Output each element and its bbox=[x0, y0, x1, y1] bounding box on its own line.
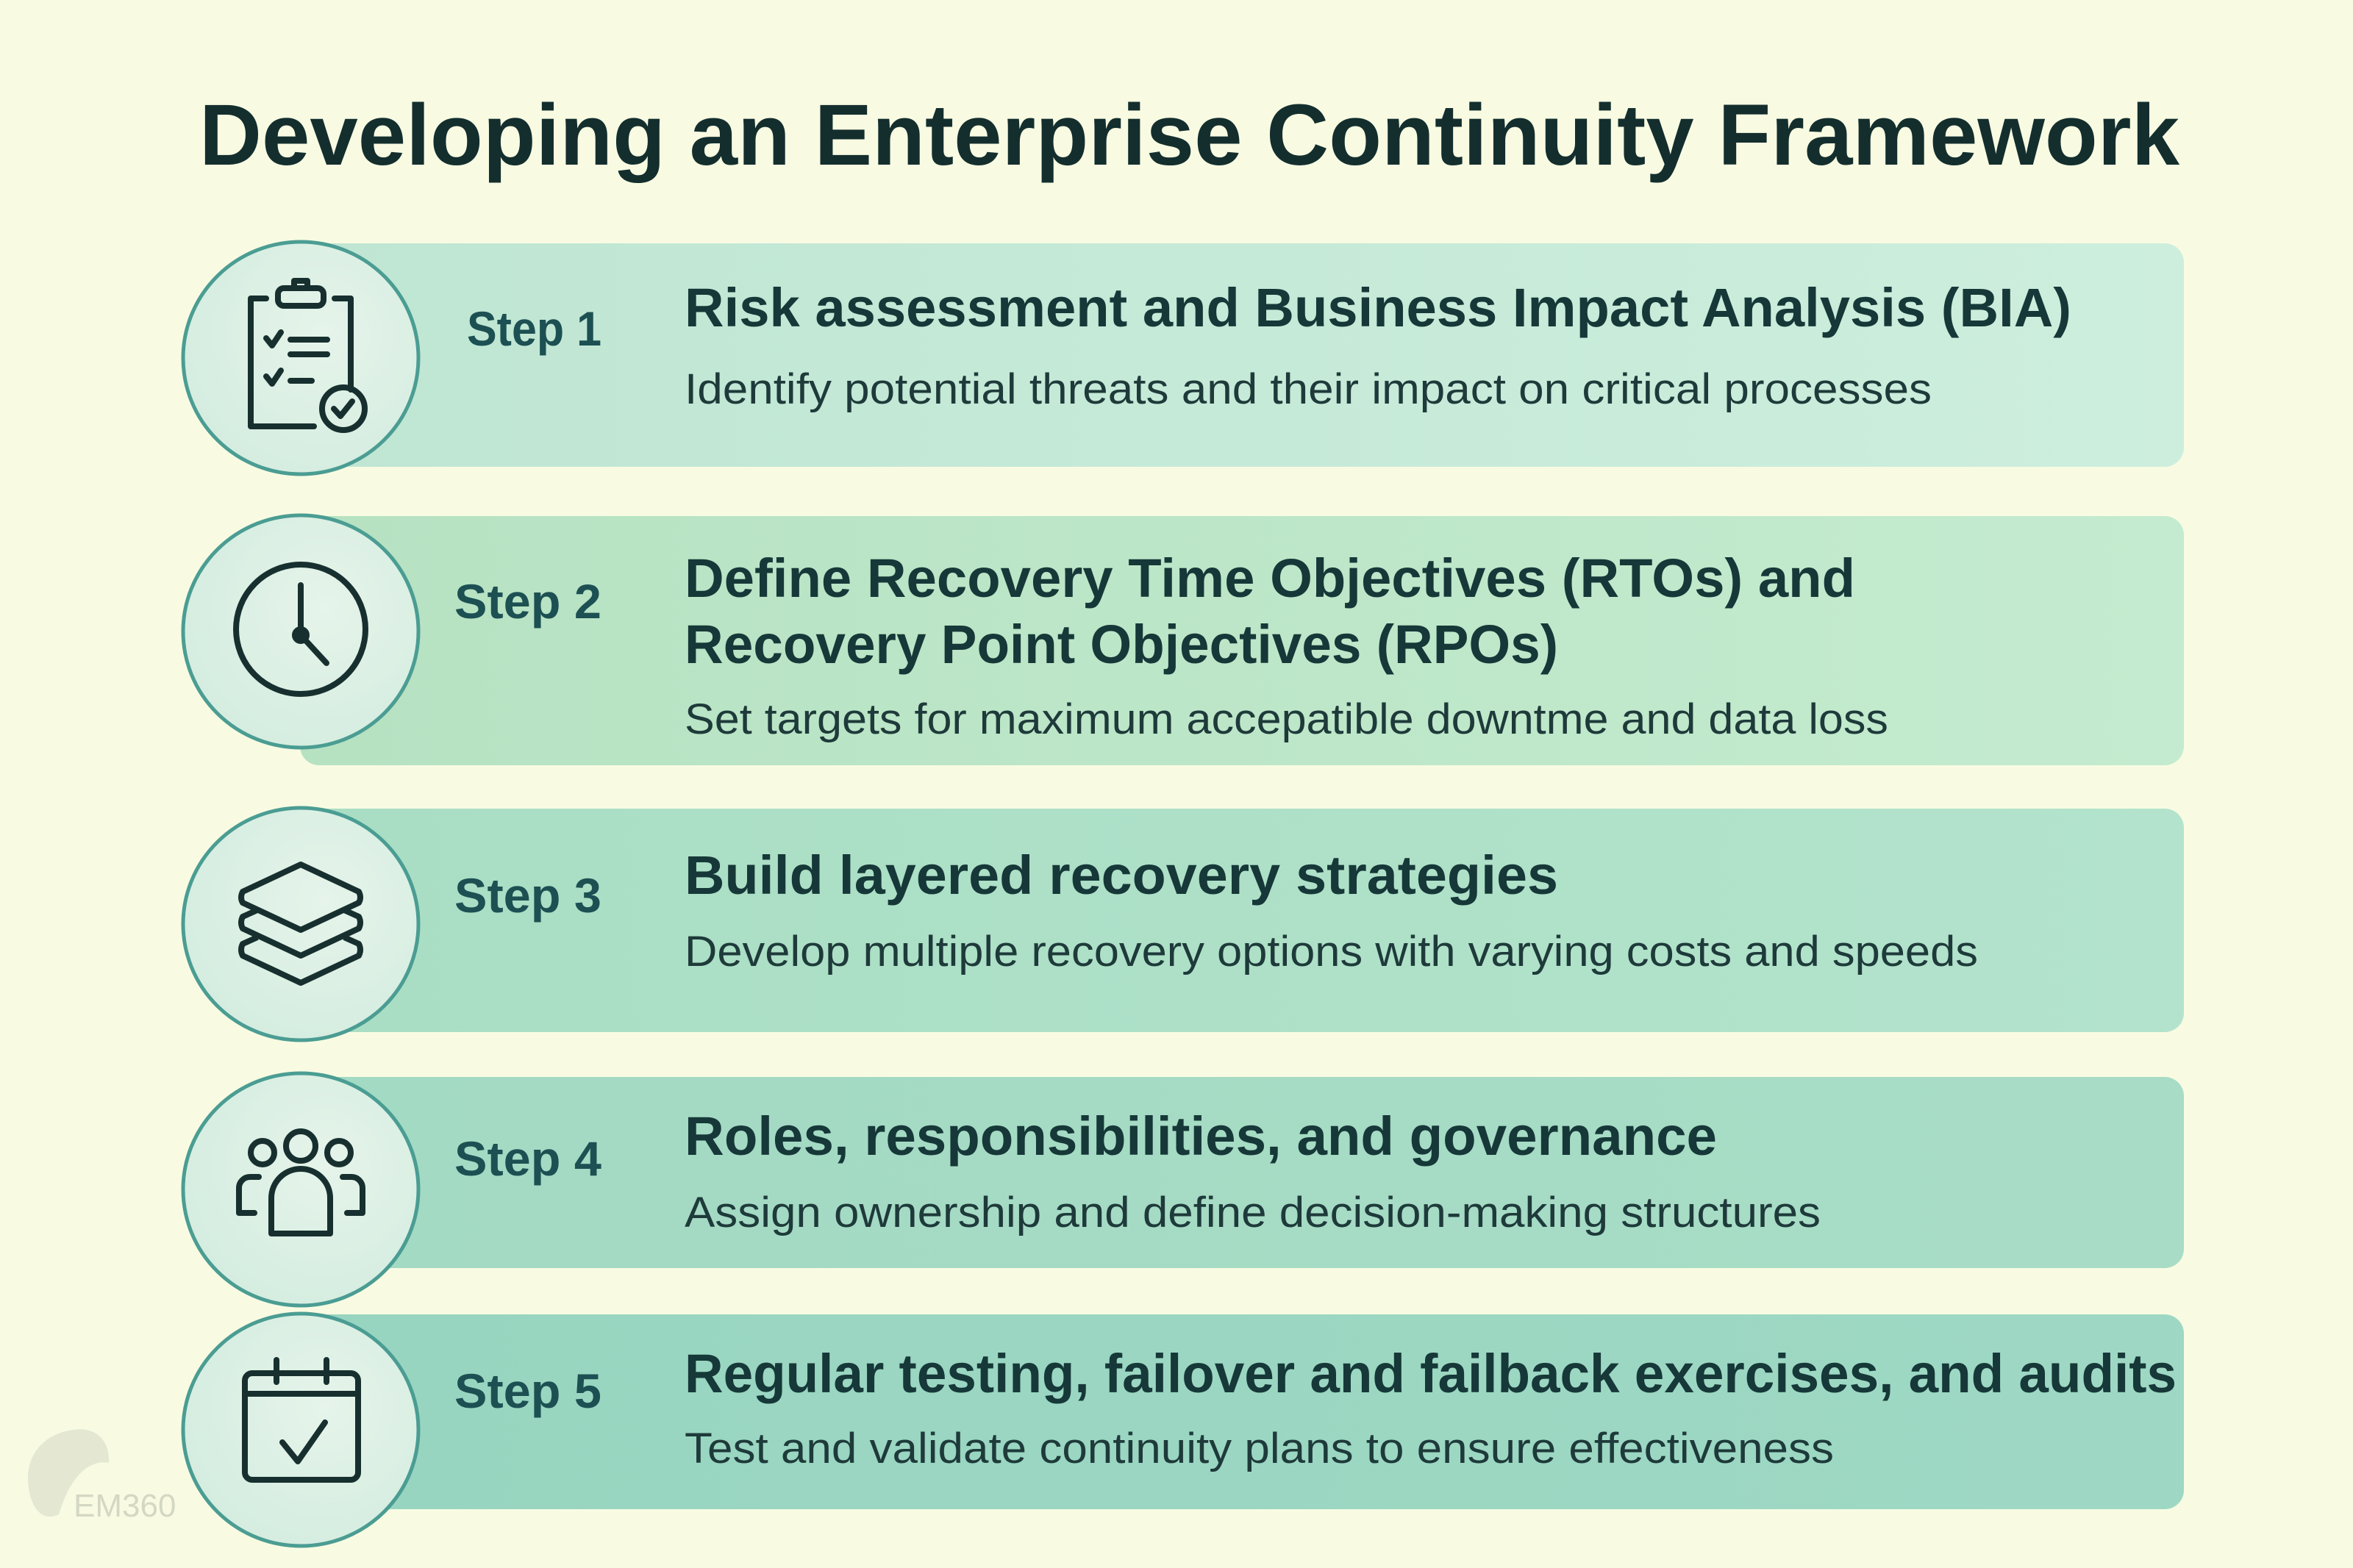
heading 3: Build layered recovery strategies bbox=[685, 845, 1558, 906]
heading 5: Regular testing, failover and failback exercises, and audits bbox=[685, 1343, 2177, 1404]
icon: clipboard bbox=[251, 281, 365, 430]
icon: people bbox=[239, 1131, 363, 1234]
panel: step 2 bbox=[183, 515, 2184, 765]
icon: layers bbox=[241, 864, 360, 983]
description 4: Assign ownership and define decision-making structures bbox=[685, 1189, 1821, 1236]
panel: step 5 bbox=[183, 1314, 2184, 1546]
panel: step 2: Recovery Point Objectives (RPOs) bbox=[685, 614, 1558, 675]
step label 3: Step 3 bbox=[454, 868, 601, 923]
description 2: Set targets for maximum accepatible downtme and data loss bbox=[685, 695, 1888, 743]
description 3: Develop multiple recovery options with varying costs and speeds bbox=[685, 928, 1978, 975]
description 5: Test and validate continuity plans to ensure effectiveness bbox=[685, 1425, 1834, 1472]
title: Developing an Enterprise Continuity Framework bbox=[199, 87, 2179, 184]
panel: step 1 bbox=[183, 242, 2184, 474]
panel: step 4 bbox=[183, 1073, 2184, 1306]
step label 4: Step 4 bbox=[454, 1131, 601, 1186]
heading 2: Define Recovery Time Objectives (RTOs) and bbox=[685, 548, 1855, 609]
panel: step 3 bbox=[183, 808, 2184, 1040]
heading 4: Roles, responsibilities, and governance bbox=[685, 1106, 1717, 1167]
heading 1: Risk assessment and Business Impact Analysis (BIA) bbox=[685, 277, 2071, 338]
step label 2: Step 2 bbox=[454, 574, 601, 629]
step label 5: Step 5 bbox=[454, 1364, 601, 1418]
logo: EM360 bbox=[28, 1429, 176, 1524]
icon: clock bbox=[236, 565, 365, 694]
icon: calendar check bbox=[245, 1360, 358, 1480]
step label 1: Step 1 bbox=[467, 301, 601, 356]
description 1: Identify potential threats and their impact on critical processes bbox=[685, 365, 1932, 413]
logo: EM360: EM360 bbox=[74, 1488, 176, 1524]
